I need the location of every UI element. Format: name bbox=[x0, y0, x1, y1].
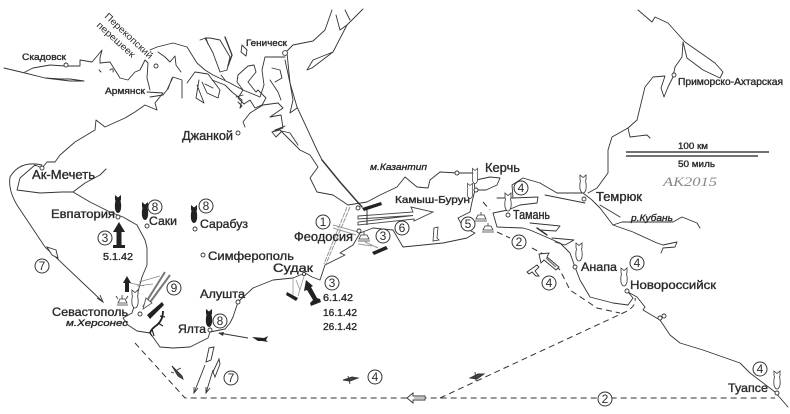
thick arrow: Sudak landing bbox=[304, 280, 321, 306]
icon: white bombs bbox=[132, 168, 780, 389]
arrows: landing at Kamysh-Burun bbox=[358, 207, 433, 225]
map: Crimea coastline bbox=[17, 92, 500, 348]
arrows: route 1 to Feodosia bbox=[130, 207, 378, 296]
icon: aircraft markers on route 7 bbox=[47, 247, 220, 377]
date: 6.1.42 bbox=[323, 293, 353, 304]
thick arrow: Evpatoria landing bbox=[113, 222, 125, 248]
label: Армянск bbox=[105, 86, 146, 97]
label: Темрюк bbox=[596, 190, 643, 204]
circled numbers bbox=[35, 181, 767, 406]
map: Taman peninsula bbox=[493, 178, 788, 407]
circled numbers: 4 bbox=[757, 362, 764, 376]
circled numbers: 2 bbox=[516, 235, 523, 249]
circled numbers: 3 bbox=[380, 229, 387, 243]
label: Ялта bbox=[178, 322, 206, 336]
label: р.Кубань bbox=[630, 213, 673, 224]
scale bar bbox=[626, 141, 769, 169]
circled numbers: 9 bbox=[171, 281, 178, 295]
label: Геническ bbox=[246, 38, 288, 49]
circled numbers: 8 bbox=[217, 314, 224, 328]
scale label miles: 50 миль bbox=[678, 159, 715, 169]
label: Судак bbox=[273, 261, 314, 275]
label: Перекопский bbox=[102, 11, 155, 61]
label: Туапсе bbox=[728, 381, 768, 395]
circled numbers: 2 bbox=[602, 392, 609, 406]
icon: small vessel bbox=[433, 227, 439, 241]
circled numbers: 4 bbox=[546, 276, 553, 290]
aircraft route 7 bbox=[10, 164, 213, 393]
raid dates bbox=[103, 252, 357, 333]
date: 5.1.42 bbox=[103, 252, 133, 263]
label: Новороссийск bbox=[630, 278, 717, 292]
circled numbers: 8 bbox=[203, 199, 210, 213]
thick arrow: small near Sevastopol bbox=[123, 276, 131, 292]
icon: dark ships bbox=[147, 202, 388, 319]
map: Skadovsk coast bbox=[4, 50, 150, 90]
scale label km: 100 км bbox=[678, 141, 708, 151]
convoy route dashed lines bbox=[135, 202, 775, 398]
circled numbers: 6 bbox=[399, 221, 406, 235]
circled numbers: 7 bbox=[228, 371, 235, 385]
front line at Sevastopol bbox=[150, 311, 165, 336]
date: 26.1.42 bbox=[323, 322, 357, 333]
label: Ак-Мечеть bbox=[32, 168, 95, 182]
circled numbers: 4 bbox=[518, 181, 525, 195]
label: м.Херсонес bbox=[66, 318, 128, 329]
circled numbers: 3 bbox=[329, 276, 336, 290]
label: Симферополь bbox=[208, 249, 294, 263]
label: Севастополь bbox=[52, 305, 128, 319]
icon: tanks bbox=[116, 212, 494, 305]
icon: dark bombs bbox=[115, 195, 212, 327]
label: м.Казантип bbox=[370, 162, 428, 173]
circled numbers: 4 bbox=[634, 256, 641, 270]
label: Джанкой bbox=[182, 129, 233, 143]
label: Анапа bbox=[581, 260, 617, 274]
label: Тамань bbox=[513, 208, 550, 222]
circled numbers: 5 bbox=[465, 217, 472, 231]
icon: enemy aircraft bbox=[171, 265, 539, 384]
label: Камыш-Бурун bbox=[395, 194, 470, 206]
label: Евпатория bbox=[51, 207, 115, 221]
circled numbers: 8 bbox=[152, 200, 159, 214]
label: Саки bbox=[149, 214, 177, 228]
label: Приморско-Ахтарская bbox=[678, 77, 783, 88]
author signature: АК2015 bbox=[662, 174, 718, 189]
circled numbers: 1 bbox=[320, 215, 327, 229]
label: Сарабуз bbox=[200, 217, 249, 231]
label: Алушта bbox=[200, 287, 245, 301]
label: Феодосия bbox=[294, 230, 353, 244]
map: Azov coast east bbox=[588, 10, 723, 193]
map: Arabat spit bbox=[285, 9, 363, 207]
icon: hollow ship on bottom route bbox=[407, 393, 425, 403]
label: Скадовск bbox=[22, 52, 67, 63]
arrow and bomber towards Yalta bbox=[218, 332, 268, 342]
label: перешеек bbox=[94, 20, 138, 61]
date: 16.1.42 bbox=[323, 308, 357, 319]
icon: hollow ship Anapa direction bbox=[539, 253, 559, 270]
town markers bbox=[40, 51, 779, 395]
arrows: hollow attack on Sevastopol bbox=[143, 272, 170, 309]
circled numbers: 4 bbox=[372, 370, 379, 384]
circled numbers: 3 bbox=[102, 231, 109, 245]
circled numbers: 7 bbox=[39, 259, 46, 273]
map: Sivash lagoon bbox=[150, 37, 298, 145]
label: Керчь bbox=[485, 161, 520, 175]
